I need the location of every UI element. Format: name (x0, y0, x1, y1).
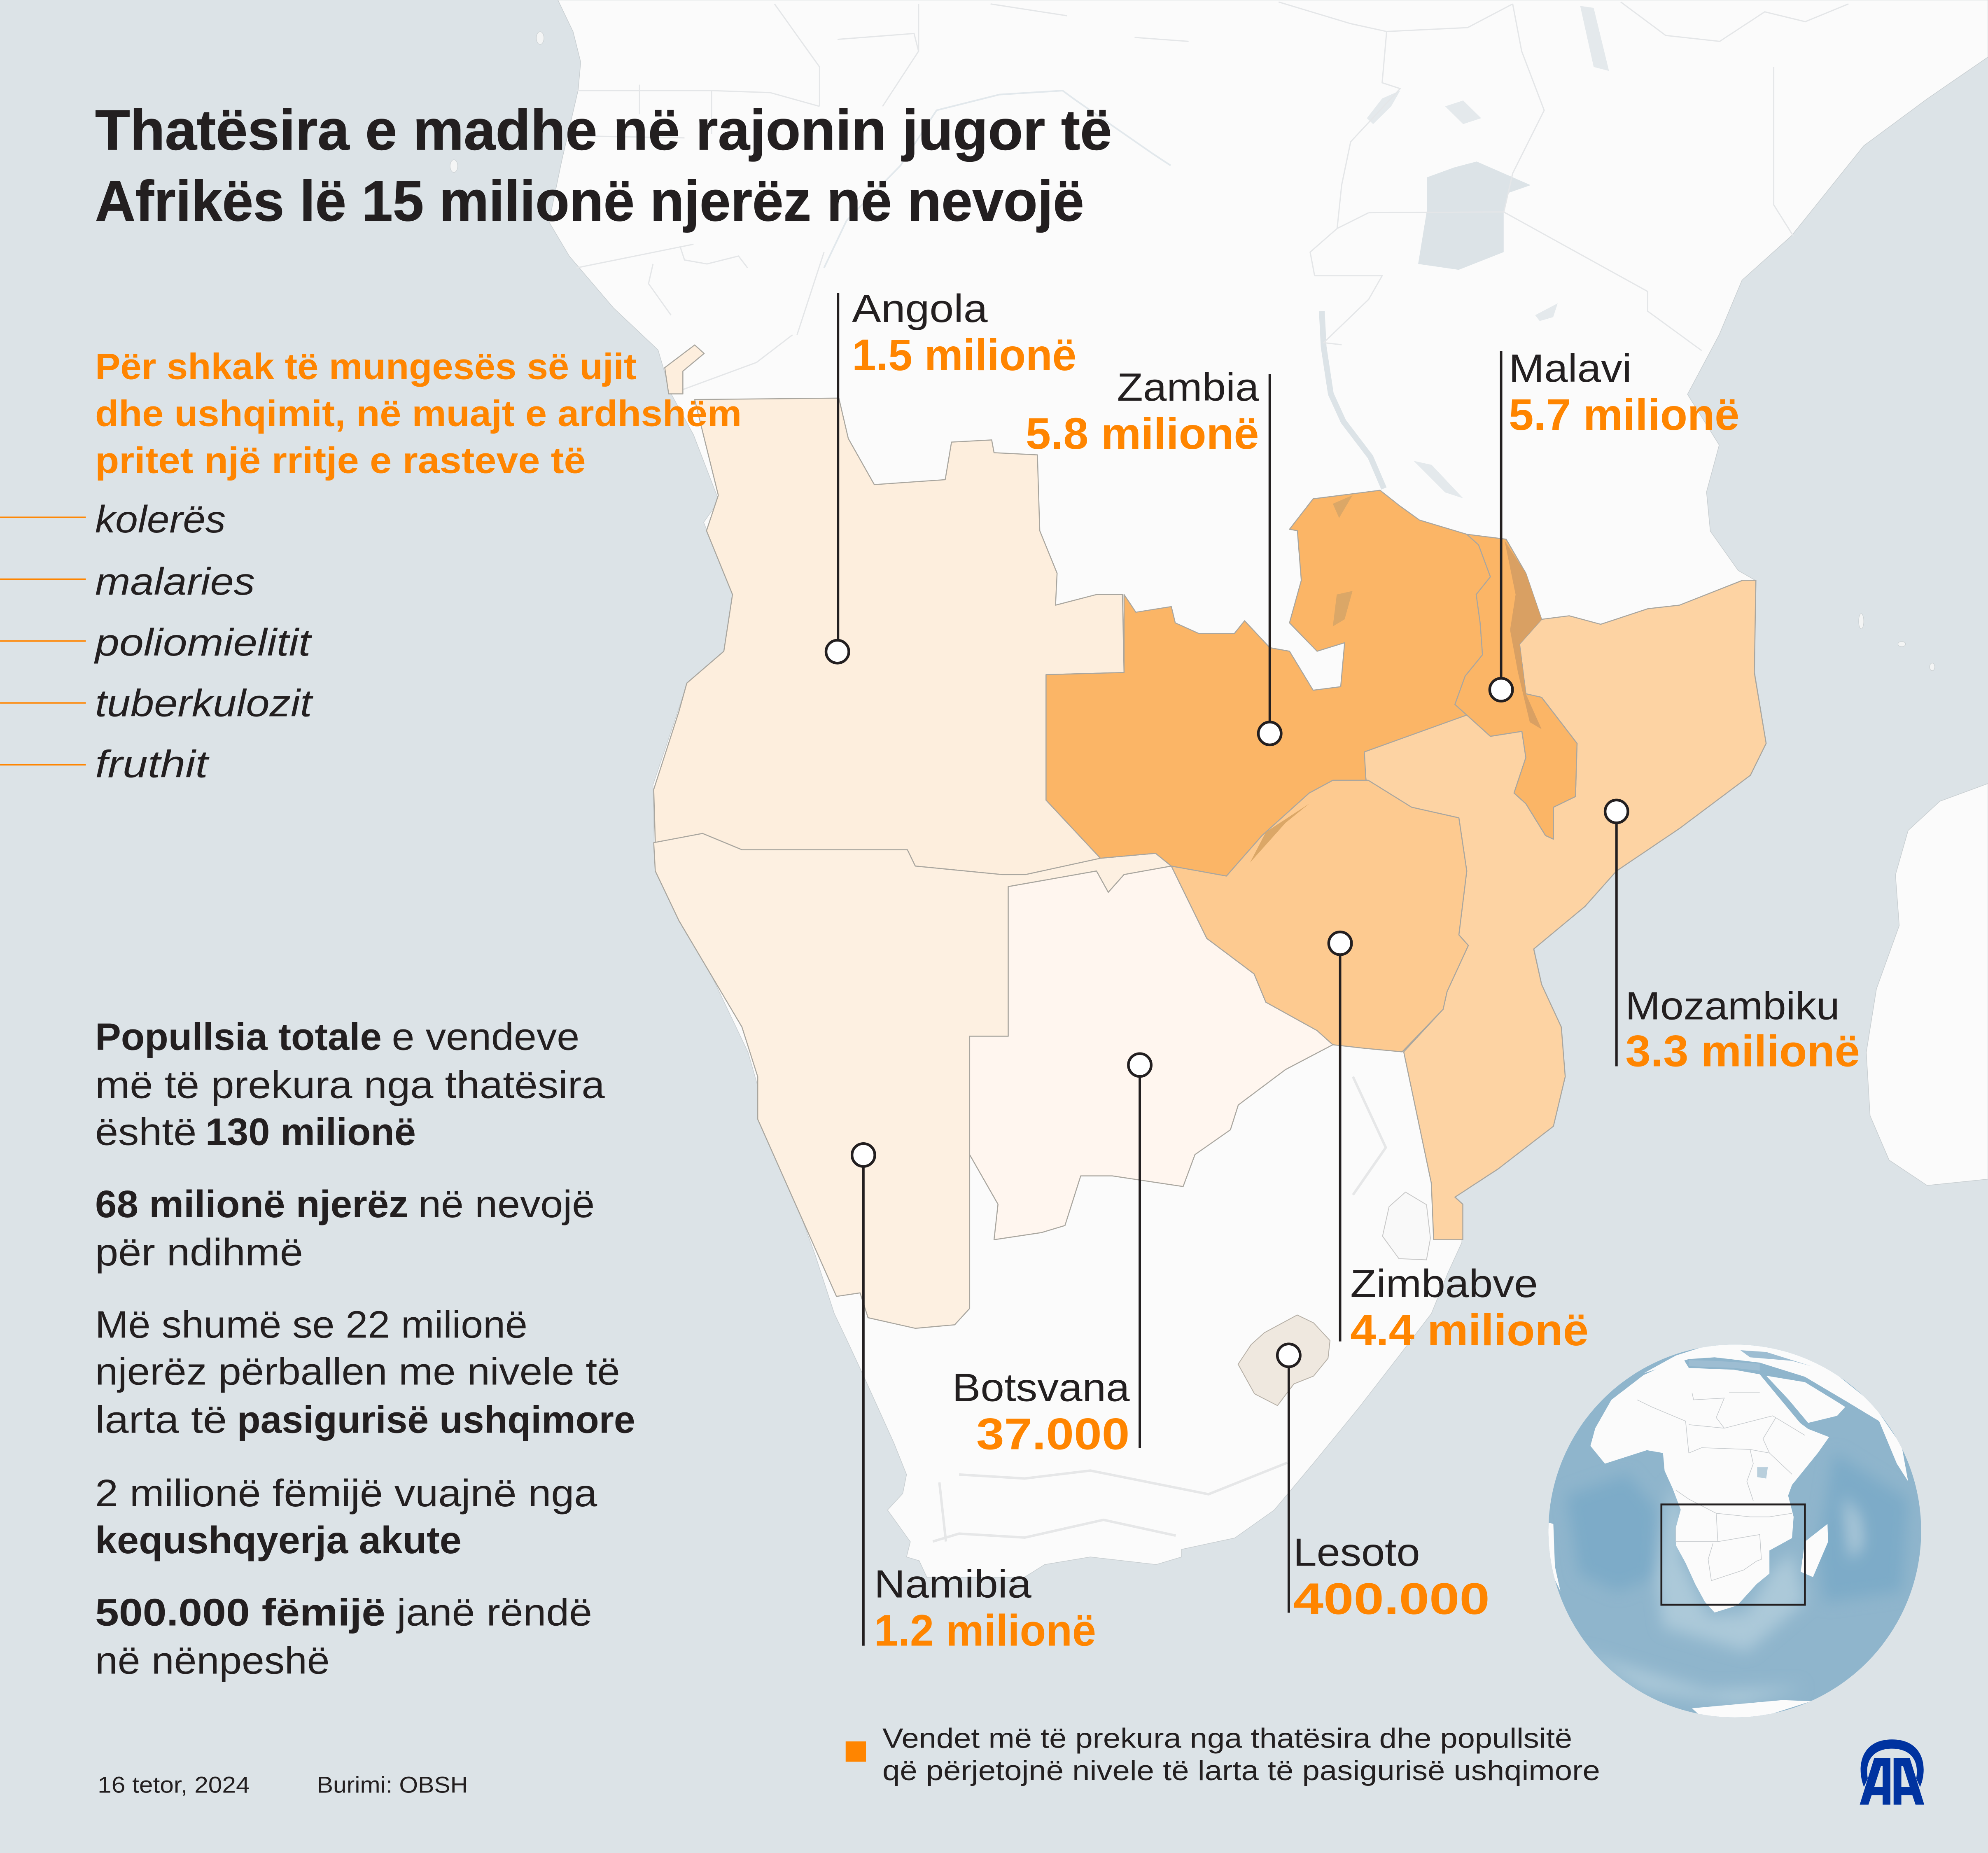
globe land: South America sliver (1547, 1522, 1561, 1591)
callout: Angola: Angola (852, 287, 988, 331)
disease list: kolerës (95, 498, 226, 541)
callout: Namibia: 1.2 milionë (874, 1606, 1096, 1655)
disease list (0, 498, 313, 785)
callout: Malawi: 5.7 milionë (1509, 390, 1739, 439)
disease list: fruthit (95, 742, 210, 785)
country: Zimbabwe shape (1171, 780, 1468, 1052)
globe locator (1547, 1341, 1921, 1719)
statistics text block: Më shumë se 22 milionë (95, 1303, 527, 1346)
statistics text block: 68 milionë njerëz (95, 1183, 408, 1225)
islands (450, 32, 1935, 671)
land: African mainland (549, 0, 1988, 1577)
statistics text block: 500.000 fëmijë (95, 1591, 385, 1634)
statistics text block: e vendeve (392, 1015, 579, 1058)
country: Malawi shape (1455, 534, 1577, 839)
statistics text block: për ndihmë (95, 1231, 303, 1274)
callout: Mozambique: Mozambiku (1625, 985, 1840, 1028)
Eswatini outline (1383, 1192, 1430, 1260)
callout: Zambia (1026, 366, 1281, 745)
title: Afrikës lë 15 milionë njerëz në nevojë (95, 170, 1084, 233)
statistics text block: larta të (95, 1398, 227, 1441)
country: Namibia shape (654, 833, 1171, 1328)
callout: Botswana: 37.000 (976, 1409, 1129, 1459)
callout: Namibia (852, 1144, 1096, 1655)
callout: Zimbabwe: 4.4 milionë (1350, 1305, 1589, 1355)
statistics text block: pasigurisë ushqimore (237, 1398, 635, 1441)
legend (846, 1723, 1600, 1786)
callout: Malawi: Malavi (1509, 347, 1632, 390)
statistics text block: 2 milionë fëmijë vuajnë nga (95, 1472, 597, 1515)
globe land: Africa and Arabia (1590, 1357, 1829, 1613)
faint borders north (576, 2, 1848, 394)
lesotho shape (1238, 1315, 1330, 1405)
callout: Zimbabwe (1329, 932, 1589, 1355)
Lake Malawi (1505, 541, 1542, 729)
callout: Lesotho: 400.000 (1293, 1574, 1490, 1624)
disease list: tuberkulozit (95, 682, 313, 725)
country: Angola shape (654, 345, 1124, 875)
globe land: Europe and Asia rim (1644, 1341, 1908, 1482)
statistics text block: Popullsia totale (95, 1015, 382, 1058)
legend: Vendet më të prekura nga thatësira dhe popullsitë (882, 1723, 1572, 1754)
statistics text block (95, 1015, 635, 1682)
statistics text block: në nevojë (418, 1183, 595, 1225)
callout: Mozambique (1605, 800, 1860, 1076)
callout: Lesotho: Lesoto (1293, 1531, 1420, 1575)
callout: Botswana: Botsvana (952, 1366, 1130, 1410)
title: Thatësira e madhe në rajonin jugor të (95, 98, 1112, 162)
disease list: poliomielitit (94, 621, 312, 664)
orange intro text: Për shkak të mungesës së ujit (95, 346, 637, 387)
callout: Botswana (952, 1054, 1151, 1459)
statistics text block: më të prekura nga thatësira (95, 1063, 605, 1106)
map: base land (450, 0, 1988, 1577)
Mediterranean and Black Sea (1689, 1350, 1811, 1371)
globe land: Antarctica (1692, 1700, 1811, 1719)
country: Zambia shape (1046, 490, 1491, 876)
callout: Angola (826, 287, 1076, 663)
inner lakes (1250, 495, 1353, 863)
globe ocean shading (1566, 1453, 1908, 1705)
orange intro text: pritet një rritje e rasteve të (95, 439, 586, 481)
disease list: malaries (95, 560, 255, 603)
callout: Malawi (1490, 347, 1739, 701)
lakes and rivers (824, 6, 1609, 498)
map: South Africa terrain details (933, 1077, 1430, 1542)
globe ocean (1548, 1344, 1921, 1718)
orange intro text (95, 346, 742, 481)
callout: Lesotho (1277, 1344, 1490, 1624)
inset rectangle (1661, 1505, 1805, 1605)
callout: Zambia: 5.8 milionë (1026, 408, 1259, 458)
globe borders (1637, 1393, 1805, 1581)
statistics text block: janë rëndë (396, 1591, 592, 1634)
callout: Zimbabwe: Zimbabve (1350, 1262, 1538, 1306)
statistics text block: kequshqyerja akute (95, 1519, 462, 1561)
footer date and source: 16 tetor, 2024 (98, 1772, 250, 1798)
logo: Anadolu Agency (1860, 1739, 1924, 1805)
statistics text block: në nënpeshë (95, 1639, 330, 1682)
callout: Namibia: Namibia (874, 1563, 1032, 1606)
callout: Mozambique: 3.3 milionë (1625, 1026, 1860, 1076)
country: Mozambique shape (1362, 580, 1766, 1240)
orange intro text: dhe ushqimit, në muajt e ardhshëm (95, 393, 742, 434)
globe land: Madagascar (1801, 1524, 1828, 1577)
statistics text block: është (95, 1110, 196, 1153)
map: highlighted countries (654, 345, 1766, 1328)
footer date and source: Burimi: OBSH (317, 1772, 468, 1798)
footer date and source (98, 1772, 468, 1798)
statistics text block: njerëz përballen me nivele të (95, 1350, 620, 1393)
callout: Zambia: Zambia (1117, 366, 1260, 409)
title (95, 98, 1112, 233)
callout: Angola: 1.5 milionë (852, 330, 1076, 380)
country: Botswana shape (970, 866, 1333, 1240)
statistics text block: 130 milionë (205, 1110, 416, 1153)
land: Madagascar (1866, 784, 1988, 1186)
legend: që përjetojnë nivele të larta të pasigurisë ushqimore (882, 1755, 1600, 1786)
